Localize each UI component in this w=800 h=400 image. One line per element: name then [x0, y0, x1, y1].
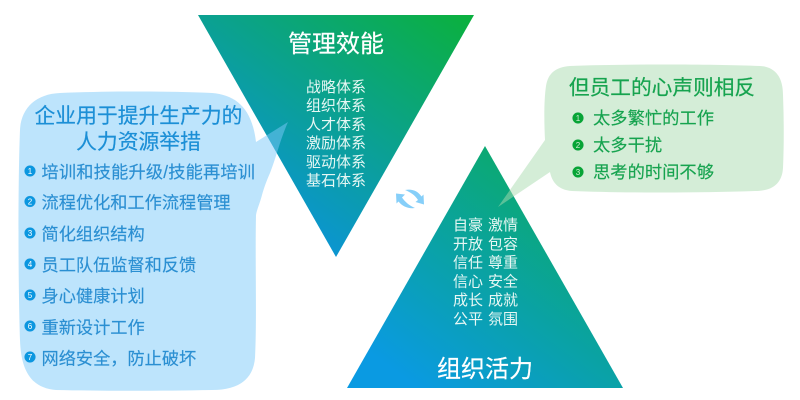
text block: vitality qualities: 自豪 — [453, 216, 483, 234]
list: employee complaints: 太多繁忙的工作 — [593, 108, 714, 128]
list: HR measures: 培训和技能升级/技能再培训 — [42, 162, 255, 182]
panel: organizational vitality triangle — [347, 146, 623, 388]
list: HR measures: 1 — [28, 167, 33, 176]
text block: vitality qualities: 信任 — [453, 255, 483, 272]
list: HR measures: 身心健康计划 — [42, 286, 145, 306]
text block: vitality qualities: 包容 — [488, 236, 518, 253]
list: HR measures: 简化组织结构 — [42, 224, 145, 244]
heading: HR measures: 企业用于提升生产力的 — [35, 105, 242, 128]
text block: management systems: 战略体系 — [306, 79, 366, 96]
text block: management systems: 驱动体系 — [306, 154, 366, 171]
heading: management effectiveness: 管理效能 — [288, 31, 384, 58]
text block: management systems — [306, 79, 366, 190]
list: HR measures: 4 — [28, 260, 33, 269]
panel: management effectiveness triangle — [198, 15, 474, 257]
text block: vitality qualities: 尊重 — [488, 255, 518, 272]
list: employee complaints: 3 — [576, 168, 581, 177]
text block: vitality qualities: 公平 — [453, 311, 483, 328]
text block: management systems: 激励体系 — [306, 135, 366, 152]
list: HR measures: 7 — [28, 353, 33, 362]
list: employee complaints: 1 — [576, 114, 581, 123]
panel: HR measures speech bubble — [18, 92, 288, 391]
text block: vitality qualities: 成就 — [488, 292, 518, 309]
heading: organizational vitality: 组织活力 — [437, 356, 533, 383]
text block: vitality qualities: 激情 — [488, 217, 518, 234]
text block: vitality qualities: 氛围 — [488, 311, 518, 328]
list: HR measures: 5 — [28, 291, 33, 300]
panel: employee voice speech bubble — [498, 64, 784, 207]
text block: vitality qualities: 成长 — [453, 292, 483, 309]
list: HR measures: 2 — [28, 198, 33, 206]
text block: vitality qualities: 信心 — [453, 273, 483, 290]
heading: HR measures — [35, 105, 242, 154]
text block: management systems: 组织体系 — [306, 98, 366, 115]
text block: vitality qualities: 安全 — [488, 272, 518, 290]
heading: employee voice: 但员工的心声则相反 — [569, 76, 755, 100]
text block: vitality qualities — [453, 216, 518, 328]
list: employee complaints: 思考的时间不够 — [593, 162, 714, 182]
list: employee complaints: 太多干扰 — [593, 135, 662, 155]
list: HR measures: 6 — [28, 322, 33, 331]
list: employee complaints: 2 — [576, 141, 581, 150]
list: HR measures: 流程优化和工作流程管理 — [42, 192, 231, 212]
icon: cycle arrows — [396, 190, 424, 208]
speech bubble shape: light blue — [18, 92, 288, 391]
list: HR measures: 3 — [28, 229, 33, 238]
list: HR measures: 员工队伍监督和反馈 — [42, 255, 196, 275]
text block: vitality qualities: 开放 — [453, 236, 483, 253]
heading: HR measures: 人力资源举措 — [76, 131, 201, 154]
speech bubble shape: light green — [498, 64, 784, 207]
list: HR measures: 网络安全，防止破坏 — [42, 348, 196, 368]
list: HR measures — [24, 162, 255, 368]
list: employee complaints — [572, 108, 714, 182]
text block: management systems: 人才体系 — [306, 116, 366, 133]
list: HR measures: 重新设计工作 — [42, 318, 145, 338]
text block: management systems: 基石体系 — [306, 172, 366, 190]
